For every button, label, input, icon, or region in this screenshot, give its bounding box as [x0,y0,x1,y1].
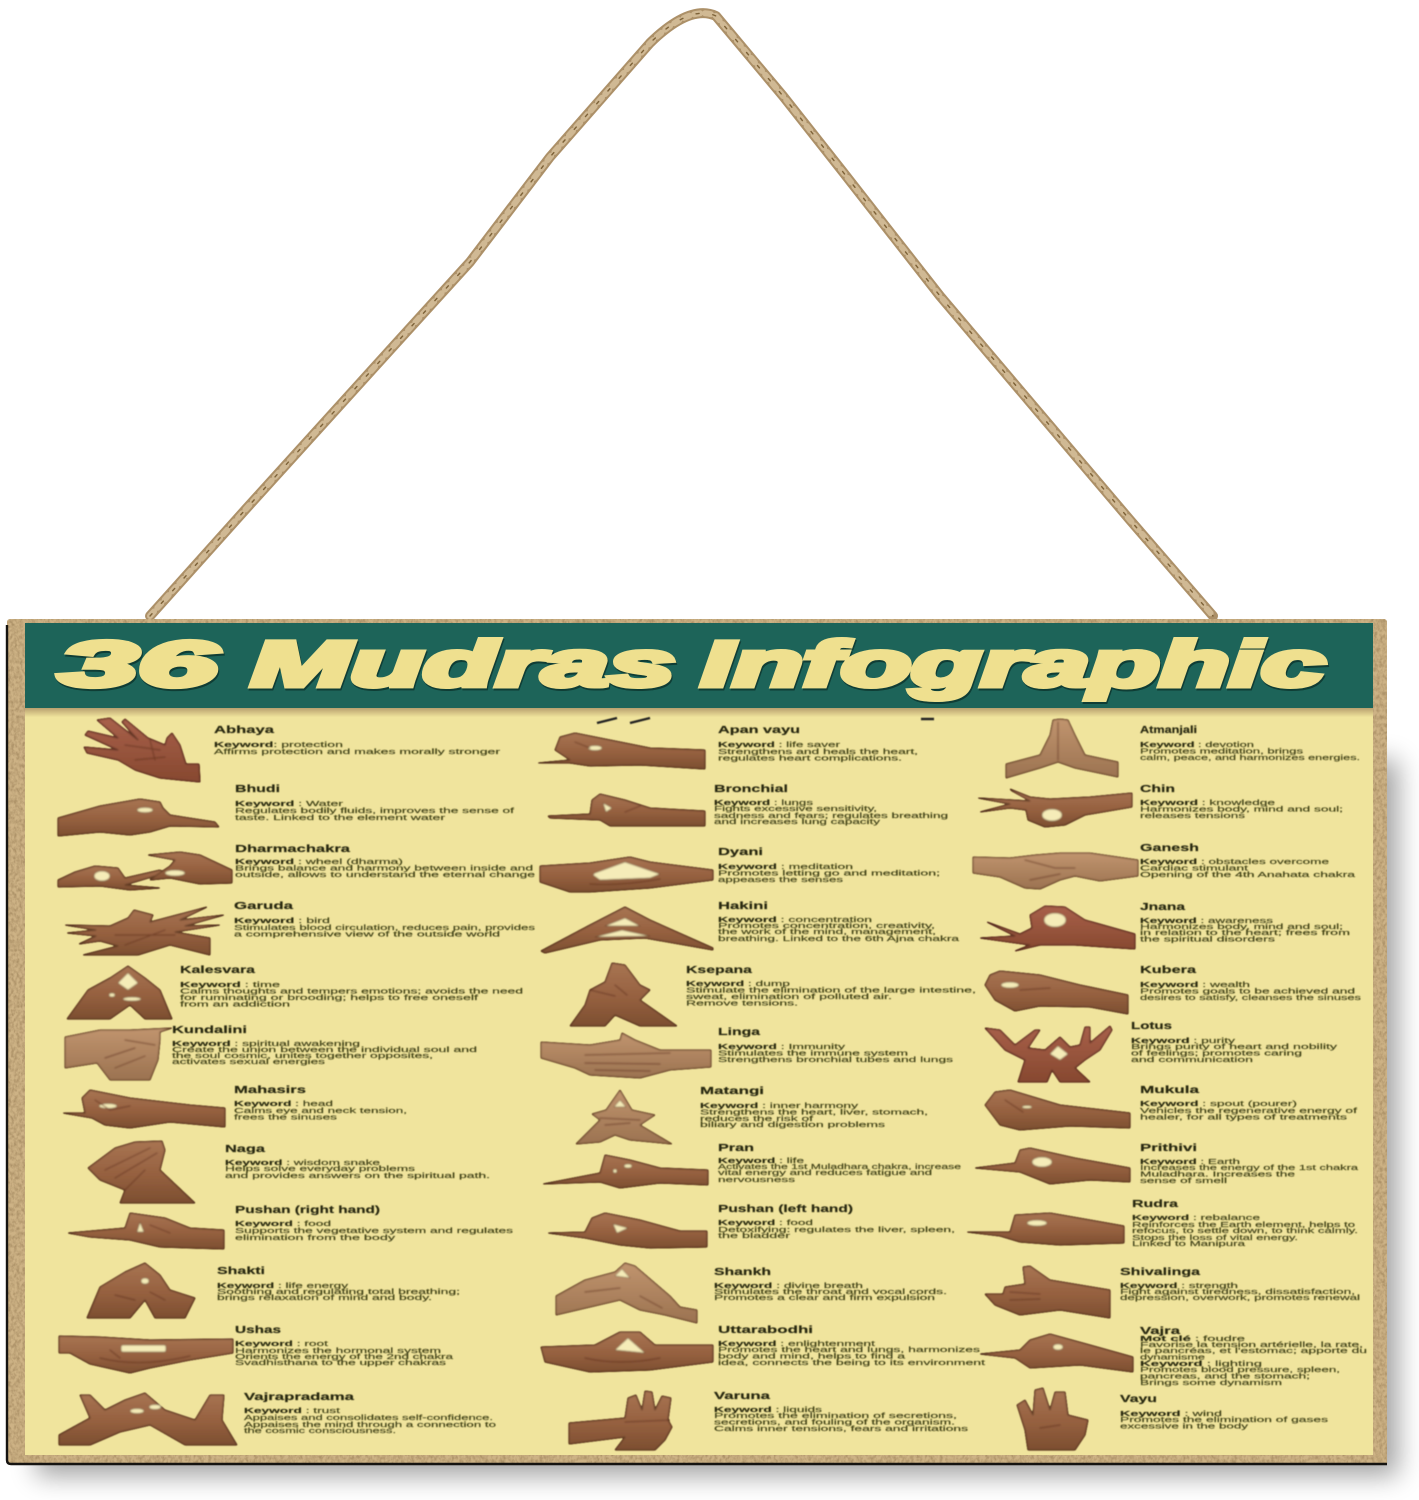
title: 36 [59,628,218,700]
text: Apan vayu: regulates heart complications. [718,754,902,762]
icon: Mukula hand [985,1090,1130,1130]
text: Shivalinga: Keyword : strength [1120,1281,1238,1290]
icon: Lotus hands [985,1026,1112,1082]
text: Lotus [1131,1020,1338,1064]
icon: Garuda hands [65,907,224,955]
mudra: Dharmachakra [58,843,535,890]
text: Prithivi: Keyword : Earth [1140,1157,1240,1166]
text: Naga: Naga [225,1143,265,1155]
text: Shivalinga: Fight against tiredness, dissatisfaction, [1120,1287,1355,1296]
text: Ganesh: Opening of the 4th Anahata chakra [1140,870,1357,879]
text: Vajrapradama: the cosmic consciousness. [244,1426,396,1435]
text: Ksepana: Stimulate the elimination of the large intestine, [686,986,976,994]
text: Mukula: Vehicles the regenerative energy of [1140,1106,1359,1115]
text: Vajrapradama [244,1391,496,1435]
text: Varuna: Varuna [714,1390,770,1402]
text: Dyani: Keyword : meditation [718,862,853,871]
text: Dharmachakra: Keyword : wheel (dharma) [235,857,403,866]
text: Pushan right hand: elimination from the body [235,1233,396,1242]
text: Matangi: Matangi [700,1085,764,1097]
text: Varuna: Calms inner tensions, fears and irritations [714,1424,969,1433]
text: Uttarabodhi: Uttarabodhi [718,1324,813,1336]
text: Ushas: Orients the energy of the 2nd chakra [235,1352,455,1361]
text: Dharmachakra: Dharmachakra [235,843,350,855]
icon: Matangi hands [576,1090,672,1144]
text: Kalesvara: from an addiction [180,1000,290,1008]
text: Bronchial [714,783,948,826]
text: Bhudi: Keyword : Water [235,799,344,808]
text: Dharmachakra: outside, allows to understand the eternal change [235,870,535,879]
icon: Dharmachakra hands [58,852,232,890]
icon: Kalesvara hands [67,966,172,1019]
icon: Vayu hand [1017,1388,1088,1450]
text: Vajra: Promotes blood pressure, spleen, [1140,1365,1340,1374]
text: Vajra: pancreas, and the stomach; [1140,1372,1310,1380]
text: Ksepana: Keyword : dump [686,979,790,988]
text: Dyani [718,846,940,884]
text: Hakini: breathing. Linked to the 6th Ajna chakra [718,934,961,943]
text: Pushan right hand: Pushan (right hand) [235,1204,380,1216]
text: Uttarabodhi: Promotes the heart and lungs, harmonizes [718,1345,981,1354]
text: Mahasirs: frees the sinuses [234,1112,338,1122]
text: Ushas: Ushas [235,1324,281,1336]
text: Prithivi [1140,1142,1360,1185]
text: Apan vayu: Keyword : life saver [718,740,841,749]
text: Vayu [1120,1393,1329,1430]
text: Hakini: the work of the mind, management, [718,927,936,936]
text: Vajrapradama: Keyword : trust [244,1406,340,1415]
text: Apan vayu [718,724,918,762]
text: Shivalinga: Shivalinga [1120,1266,1200,1278]
text: Kalesvara [180,964,523,1008]
text: Atmanjali: Atmanjali [1140,724,1197,736]
text: Ksepana: Ksepana [686,964,752,976]
text: Lotus: Keyword : purity [1131,1036,1236,1045]
text: Vajra: dynamisme [1140,1352,1205,1362]
poster cream background [25,716,1373,1455]
text: Matangi: reduces the risk of [700,1114,815,1123]
text: Shakti [217,1265,460,1302]
text: Ushas [235,1324,455,1367]
text: Bhudi [235,783,516,822]
text: Bronchial: and increases lung capacity [714,817,881,826]
mudra: Ganesh [973,842,1357,889]
text: Jnana: Keyword : awareness [1140,916,1274,925]
title: Infographic [701,628,1325,700]
mudra: Vajra [980,1325,1367,1387]
mudra: Shivalinga [985,1266,1361,1318]
text: Vajra: Keyword : lighting [1140,1359,1262,1368]
text: Mahasirs [234,1084,407,1122]
mudra: Garuda [65,900,536,955]
text: Vayu: Promotes the elimination of gases [1120,1415,1329,1424]
text: Garuda: a comprehensive view of the outside world [234,930,500,938]
mudra: Naga [88,1141,490,1203]
text: Hakini [718,900,961,943]
text: Chin: releases tensions [1140,811,1246,820]
text: Kubera: Kubera [1140,964,1196,976]
text: Vajra: le pancréas, et l'estomac; apporte du [1140,1346,1367,1355]
text: Atmanjali: calm, peace, and harmonizes energies. [1140,753,1360,762]
text: Linga: Strengthens bronchial tubes and lungs [718,1055,954,1064]
text: Shivalinga: depression, overwork, promotes renewal [1120,1293,1361,1302]
text: Naga: Helps solve everyday problems [225,1164,416,1173]
text: Lotus: and communication [1131,1055,1253,1064]
text: Ushas: Keyword : root [235,1339,328,1348]
text: Prithivi: Muladhara. Increases the [1140,1170,1295,1178]
icon: Pushan right hand [68,1213,224,1249]
mudra: Ushas [59,1324,455,1373]
text: Vayu: Vayu [1120,1393,1157,1405]
text: Linga: Keyword : Immunity [718,1042,846,1051]
mudra: Mukula [985,1084,1359,1130]
mudra: Pushan right hand [68,1204,514,1249]
mudra: Atmanjali [1006,719,1360,778]
icon: Dyani hands [540,857,713,892]
text: Vajra: Brings some dynamism [1140,1378,1282,1387]
text: Mahasirs: Calms eye and neck tension, [234,1106,407,1115]
mudra: Prithivi [975,1142,1360,1185]
mudra: Matangi [576,1085,928,1144]
mudra: Shankh [556,1263,947,1323]
text: Vajra [1140,1325,1367,1387]
mudra: Jnana [980,901,1350,951]
icon: Bronchial hand [548,794,705,826]
mudra: Kundalini [65,1024,477,1080]
text: Bronchial: sadness and fears; regulates breathing [714,811,948,820]
icon: Shakti hands [87,1263,195,1318]
text: Vajra: Favorise la tension artérielle, la rate, [1140,1340,1363,1349]
text: Ushas: Svadhisthana to the upper chakras [235,1358,447,1367]
text: Dharmachakra [235,843,535,879]
icon: Mahasirs hand [63,1090,225,1128]
icon: Kundalini hands [65,1028,172,1080]
mudra: Dyani [540,846,940,892]
mudra: Hakini [541,900,961,953]
text: Chin: Keyword : knowledge [1140,798,1275,807]
text: Pushan left hand [718,1203,955,1240]
text: Kalesvara: Calms thoughts and tempers emotions; avoids the need [180,986,523,996]
text: Mahasirs: Mahasirs [234,1084,306,1096]
text: Shankh [714,1266,947,1302]
mudra: Rudra [967,1198,1358,1248]
text: Ushas: Harmonizes the hormonal system [235,1346,441,1355]
text: Prithivi: Increases the energy of the 1st chakra [1140,1163,1360,1172]
text: Ganesh: Keyword : obstacles overcome [1140,857,1329,866]
text: Rudra: Rudra [1132,1198,1178,1210]
text: Kalesvara: Kalesvara [180,964,255,976]
text: Ganesh: Cardiac stimulant [1140,864,1248,872]
text: Lotus: Brings purity of heart and nobility [1131,1042,1338,1051]
text: Pran: vital energy and reduces fatigue and [718,1168,932,1177]
text: Abhaya: Keyword : protection [214,740,343,749]
mudra chart [58,718,1367,1450]
icon: Naga hands [88,1141,195,1203]
text: Garuda: Stimulates blood circulation, reduces pain, provides [234,923,536,932]
mudra: Pushan left hand [548,1203,955,1248]
text: Kubera: Promotes goals to be achieved and [1140,986,1355,996]
icon: Apan vayu hand [538,733,705,769]
column 1 [58,718,536,1445]
text: Pushan right hand: Supports the vegetative system and regulates [235,1226,514,1235]
text: Mukula: Keyword : spout (pourer) [1140,1099,1297,1108]
text: Kubera: desires to satisfy, cleanses the sinuses [1140,993,1362,1002]
text: Bronchial: Fights excessive sensitivity, [714,804,877,813]
text: Linga: Linga [718,1026,760,1038]
text: Pushan left hand: the bladder [718,1231,791,1240]
text: Kundalini: activates sexual energies [172,1057,326,1066]
text: Mukula [1140,1084,1359,1122]
text: Dyani: Dyani [718,846,763,858]
mudra: Varuna [569,1390,969,1450]
text: Mukula: Mukula [1140,1084,1199,1096]
icon: Ganesh hands [973,853,1138,889]
text: Hakini: Promotes concentration, creativity, [718,921,935,930]
text: Jnana: in relation to the heart; frees from [1140,928,1350,937]
icon: Vajrapradama hands [59,1393,237,1445]
text: Vayu: excessive in the body [1120,1422,1249,1430]
text: Ksepana: sweat, elimination of polluted air. [686,992,892,1001]
text: Atmanjali [1140,724,1360,762]
text: Vajra: Mot clé : foudre [1140,1334,1245,1343]
text: Rudra [1132,1198,1358,1248]
text: Lotus: Lotus [1131,1020,1172,1032]
text: Shakti: Soothing and regulating total breathing; [217,1287,460,1296]
text: Pushan left hand: Detoxifying: regulates the liver, spleen, [718,1225,955,1234]
text: Varuna: Promotes the elimination of secretions, [714,1411,957,1420]
text: Pran: Keyword : life [718,1156,804,1165]
text: Ganesh [1140,842,1357,879]
text: Kalesvara: for ruminating or brooding; helps to free oneself [180,993,480,1002]
text: Naga: and provides answers on the spiritual path. [225,1171,490,1180]
text: Garuda: Keyword : bird [234,916,330,925]
text: Shankh: Promotes a clear and firm expulsion [714,1293,935,1302]
text: Jnana [1140,901,1350,944]
icon: Ushas hands [59,1336,233,1373]
text: Jnana: Harmonizes body, mind and soul; [1140,922,1343,931]
text: Shakti: Shakti [217,1265,265,1277]
text: Vajrapradama: Appaises and consolidates self-confidence. [244,1413,493,1422]
mudra: Pran [543,1142,961,1188]
icon: Kubera hand [985,971,1128,1014]
text: Hakini: Keyword : concentration [718,915,872,924]
text: Lotus: of feelings; promotes caring [1131,1048,1302,1058]
board drop shadow [36,760,1398,1476]
text: Kubera [1140,964,1362,1002]
icon: Linga hands [541,1033,711,1078]
text: Rudra: Linked to Manipura [1132,1239,1247,1248]
text: Bronchial: Bronchial [714,783,788,795]
text: Uttarabodhi: Keyword : enlightenment [718,1339,875,1348]
text: Kundalini: Kundalini [172,1024,247,1036]
text: Pushan right hand [235,1204,514,1242]
text: Linga: Stimulates the immune system [718,1048,908,1058]
text: Ksepana: Remove tensions. [686,998,798,1008]
text: Varuna: Keyword : liquids [714,1405,823,1414]
icon: Pushan left hand [548,1213,707,1248]
text: Bhudi: Bhudi [235,783,280,795]
text: Matangi: Keyword : inner harmony [700,1101,859,1110]
text: Pushan left hand: Pushan (left hand) [718,1203,853,1215]
icon: Ksepana hands [570,963,677,1026]
text: Matangi: biliary and digestion problems [700,1120,886,1129]
mudra: Shakti [87,1263,460,1318]
text: Shankh: Keyword : divine breath [714,1281,863,1290]
text: Ganesh: Ganesh [1140,842,1199,854]
text: Kalesvara: Keyword : time [180,980,280,989]
text: Mukula: healer, for all types of treatments [1140,1112,1348,1122]
text: Pushan right hand: Keyword : food [235,1219,331,1228]
text: Linga [718,1026,954,1064]
text: Jnana: Jnana [1140,901,1185,913]
text: Kundalini: the soul cosmic, unites together opposites, [172,1051,433,1060]
text: Dyani: appeases the senses [718,875,844,884]
mudra: Bronchial [548,783,948,826]
text: Shivalinga [1120,1266,1361,1302]
text: Rudra: Reinforces the Earth element, helps to [1132,1220,1355,1229]
mudra: Kalesvara [67,964,523,1019]
text: Vajra: Vajra [1140,1325,1180,1337]
text: Pran: Pran [718,1142,754,1154]
text: Rudra: Stops the loss of vital energy. [1132,1233,1298,1242]
icon: Atmanjali hands [1006,719,1118,778]
text: Bhudi: taste. Linked to the element water [235,813,446,822]
title: Mudras [251,628,675,700]
text: Naga [225,1143,490,1180]
text: Uttarabodhi [718,1324,985,1367]
text: Shankh: Shankh [714,1266,771,1278]
wooden board [7,619,1387,1465]
text: Prithivi: Prithivi [1140,1142,1197,1154]
text: Matangi: Strengthens the heart, liver, stomach, [700,1108,928,1116]
mudra: Abhaya [84,718,501,782]
mudra: Vayu [1017,1388,1329,1450]
icon: Shivalinga hand [985,1266,1110,1318]
text: Pushan left hand: Keyword : food [718,1218,813,1227]
text: Jnana: the spiritual disorders [1140,934,1276,944]
mudra: Lotus [985,1020,1338,1082]
text: Dharmachakra: Brings balance and harmony between inside and [235,864,533,872]
text: Varuna [714,1390,969,1433]
text: Shakti: brings relaxation of mind and body. [217,1293,432,1302]
icon: Varuna hands [569,1391,672,1450]
text: Matangi [700,1085,928,1129]
text: Abhaya [214,724,501,756]
mudra: Ksepana [570,963,976,1026]
mudra: Uttarabodhi [541,1324,985,1372]
text: Pran: Activates the 1st Muladhara chakra, increase [718,1162,961,1171]
text: Chin [1140,783,1343,820]
text: Apan vayu: Strengthens and heals the heart, [718,747,918,756]
text: Vajrapradama: Vajrapradama [244,1391,354,1403]
icon: Vajra hand [980,1334,1133,1372]
mudra: Mahasirs [63,1084,407,1128]
text: Pran [718,1142,961,1184]
text: Abhaya: Abhaya [214,724,274,736]
text: Prithivi: sense of smell [1140,1176,1228,1185]
header band [25,623,1373,708]
text: Naga: Keyword : wisdom snake [225,1158,380,1167]
text: Atmanjali: Promotes meditation, brings [1140,746,1304,756]
text: Garuda [234,900,536,938]
text: Kubera: Keyword : wealth [1140,980,1250,989]
text: Ksepana [686,964,976,1008]
text: Apan vayu: Apan vayu [718,724,800,736]
text: Abhaya: Affirms protection and makes morally stronger [214,747,501,756]
text: Shankh: Stimulates the throat and vocal cords. [714,1287,947,1296]
text: Bhudi: Regulates bodily fluids, improves the sense of [235,806,516,815]
text: Uttarabodhi: idea, connects the being to its environment [718,1358,985,1367]
text: Atmanjali: Keyword : devotion [1140,740,1254,749]
icon: Prithivi hand [975,1148,1130,1184]
icon: Pran hand [543,1155,708,1188]
icon: Hakini hands [541,907,713,953]
icon: Chin hand [978,789,1132,827]
text: Kundalini: Keyword : spiritual awakening [172,1039,360,1048]
icon: Jnana hand [980,906,1135,951]
text: Mahasirs: Keyword : head [234,1099,333,1108]
column 3 [967,719,1367,1450]
mudra: Linga [541,1026,954,1078]
text: Vajrapradama: Appaises the mind through a connection to [244,1420,496,1429]
icon: Abhaya hand [84,718,200,782]
text: Garuda: Garuda [234,900,293,912]
icon: Rudra hand [967,1213,1124,1245]
column 2 [538,724,985,1450]
text: Kundalini: Create the union between the individual soul and [172,1045,477,1054]
text: Kundalini [172,1024,477,1066]
mudra: Vajrapradama [59,1391,496,1445]
text: Uttarabodhi: body and mind, helps to find a [718,1352,907,1360]
mudra: Apan vayu [538,724,918,769]
text: Bronchial: Keyword : lungs [714,798,814,807]
icon: Shankh hands [556,1263,697,1323]
icon: Uttarabodhi hands [541,1332,713,1372]
mudra: Kubera [985,964,1362,1014]
text: Chin: Chin [1140,783,1175,795]
text: Rudra: Keyword : rebalance [1132,1213,1260,1222]
mudra: Chin [978,783,1343,827]
text: Hakini: Hakini [718,900,768,912]
icon: Bhudi hand [58,799,219,836]
text: Varuna: secretions, and fouling of the organism. [714,1418,955,1426]
text: Pran: nervousness [718,1175,796,1184]
text: Shakti: Keyword : life energy [217,1281,349,1290]
mudra: Bhudi [58,783,516,836]
text: Dyani: Promotes letting go and meditation; [718,868,940,878]
text: Chin: Harmonizes body, mind and soul; [1140,804,1343,814]
hanging rope [150,13,1213,616]
text: Vayu: Keyword : wind [1120,1409,1222,1418]
text: Rudra: refocus, to settle down, to think calmly. [1132,1226,1358,1235]
